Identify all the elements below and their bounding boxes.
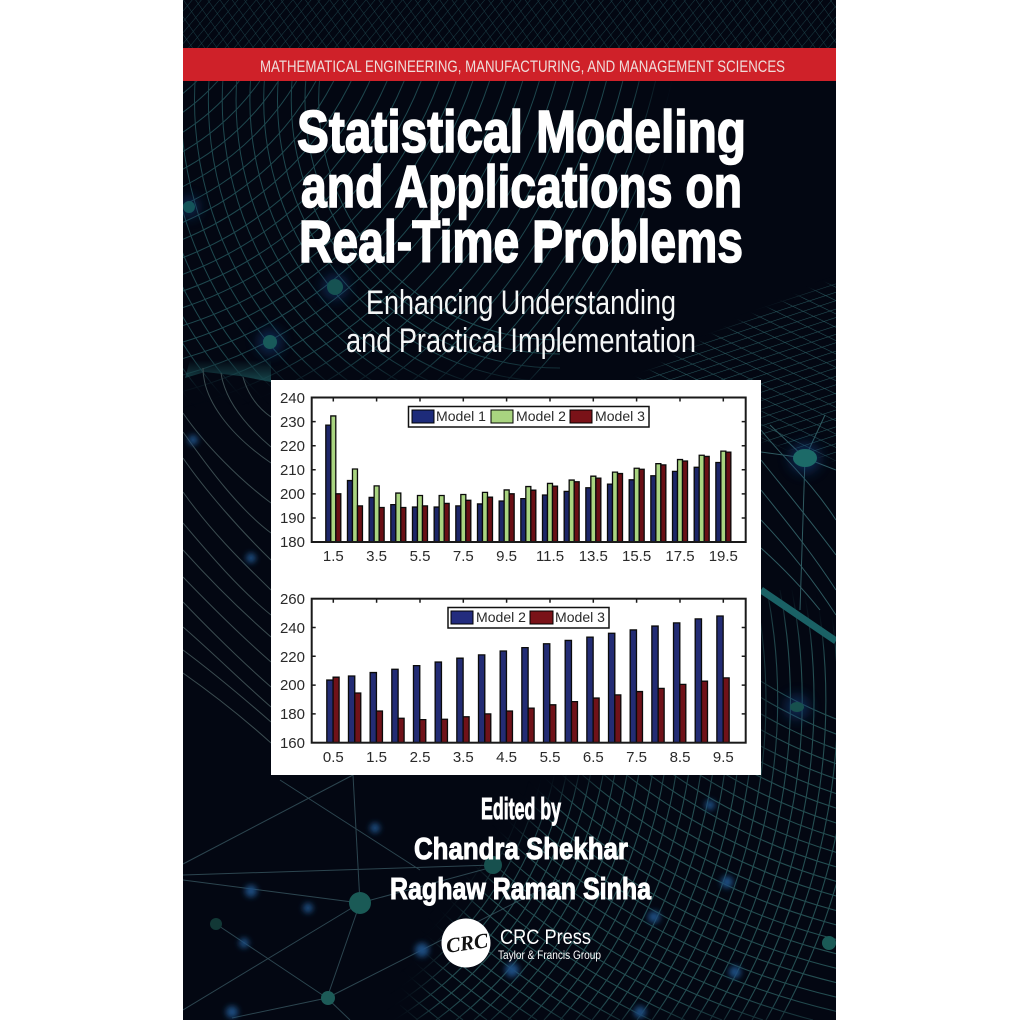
- title: [297, 99, 746, 275]
- y axis labels: [280, 390, 305, 551]
- x axis labels: [323, 548, 738, 565]
- x axis labels: 7.5: [626, 749, 647, 766]
- y axis labels: 200: [280, 677, 305, 694]
- x axis labels: 4.5: [496, 749, 517, 766]
- x axis labels: 9.5: [496, 548, 517, 565]
- y axis labels: 260: [280, 591, 305, 608]
- subtitle: [346, 284, 696, 360]
- title: Real-Time Problems: [299, 209, 743, 275]
- y axis labels: 160: [280, 735, 305, 752]
- legend: [408, 406, 649, 427]
- legend: [448, 608, 609, 628]
- x axis labels: 11.5: [536, 548, 564, 565]
- editors: Edited by: [481, 791, 561, 826]
- bars: model 3: [333, 677, 729, 743]
- legend: Model 3: [555, 609, 605, 625]
- mesh: upper left bowl: [183, 81, 662, 390]
- icon: CRC circle: [442, 918, 490, 968]
- bars: model 2: [331, 416, 726, 542]
- y axis labels: 190: [280, 510, 305, 527]
- x axis labels: 0.5: [323, 749, 344, 766]
- subtitle: Enhancing Understanding: [366, 284, 676, 322]
- editors: Chandra Shekhar: [414, 831, 628, 866]
- bars: model 2: [327, 616, 723, 743]
- title: and Applications on: [301, 154, 742, 220]
- x axis labels: 2.5: [410, 749, 430, 766]
- x axis labels: 3.5: [453, 749, 474, 766]
- x axis labels: 6.5: [583, 749, 604, 766]
- y axis labels: 240: [280, 620, 305, 637]
- series name: MATHEMATICAL ENGINEERING, MANUFACTURING, AND MANAGEMENT SCIENCES: [260, 58, 785, 76]
- axes frame: [312, 599, 746, 743]
- publisher logo: Taylor & Francis Group: [498, 948, 601, 962]
- mesh: lower right: [404, 590, 836, 1020]
- bar chart: two models: [280, 591, 746, 766]
- publisher logo: [442, 918, 601, 968]
- x axis labels: 15.5: [622, 548, 651, 565]
- red series band: [183, 48, 836, 81]
- mesh: top strip: [183, 0, 836, 50]
- legend: Model 2: [516, 408, 566, 424]
- y axis labels: 180: [280, 706, 305, 723]
- x axis labels: 8.5: [670, 749, 690, 766]
- y axis labels: 220: [280, 438, 305, 455]
- title: Statistical Modeling: [297, 99, 746, 165]
- x axis labels: 17.5: [665, 548, 695, 565]
- editors: Raghaw Raman Sinha: [390, 871, 652, 906]
- publisher name: CRC Press: [500, 926, 591, 949]
- legend: Model 2: [476, 609, 526, 625]
- x axis labels: [323, 749, 734, 766]
- cover background: [183, 0, 836, 1020]
- y axis labels: [280, 591, 305, 752]
- x axis labels: 3.5: [366, 548, 387, 565]
- legend: Model 3: [595, 408, 645, 424]
- bars: model 3: [336, 452, 731, 542]
- x axis labels: 1.5: [366, 749, 387, 766]
- y axis labels: 230: [280, 414, 305, 431]
- book cover: [183, 0, 836, 1020]
- editors: [390, 791, 652, 906]
- network lines: [183, 775, 560, 1020]
- y axis labels: 240: [280, 390, 305, 407]
- x axis labels: 9.5: [713, 749, 734, 766]
- x axis labels: 1.5: [323, 548, 344, 565]
- network nodes: [179, 197, 836, 1018]
- legend: Model 1: [436, 408, 486, 424]
- icon: CRC circle: CRC: [445, 928, 490, 958]
- x axis labels: 7.5: [453, 548, 474, 565]
- x axis labels: 5.5: [410, 548, 430, 565]
- y axis labels: 210: [280, 462, 305, 479]
- teal diagonal band: [761, 590, 836, 641]
- subtitle: and Practical Implementation: [346, 322, 696, 360]
- x axis labels: 5.5: [540, 749, 560, 766]
- bars: model 1: [326, 425, 721, 542]
- y axis labels: 180: [280, 534, 305, 551]
- mesh: right wave: [637, 282, 836, 462]
- white chart panel: [271, 380, 761, 775]
- bar chart: three models: [280, 390, 746, 565]
- x axis labels: 19.5: [709, 548, 738, 565]
- x axis labels: 13.5: [579, 548, 608, 565]
- sparse curves: left middle: [183, 368, 271, 743]
- teal strip above left middle: [185, 363, 271, 382]
- y axis labels: 220: [280, 649, 305, 666]
- sparse lines: right middle: [761, 415, 836, 615]
- axes frame: [312, 398, 746, 542]
- y axis labels: 200: [280, 486, 305, 503]
